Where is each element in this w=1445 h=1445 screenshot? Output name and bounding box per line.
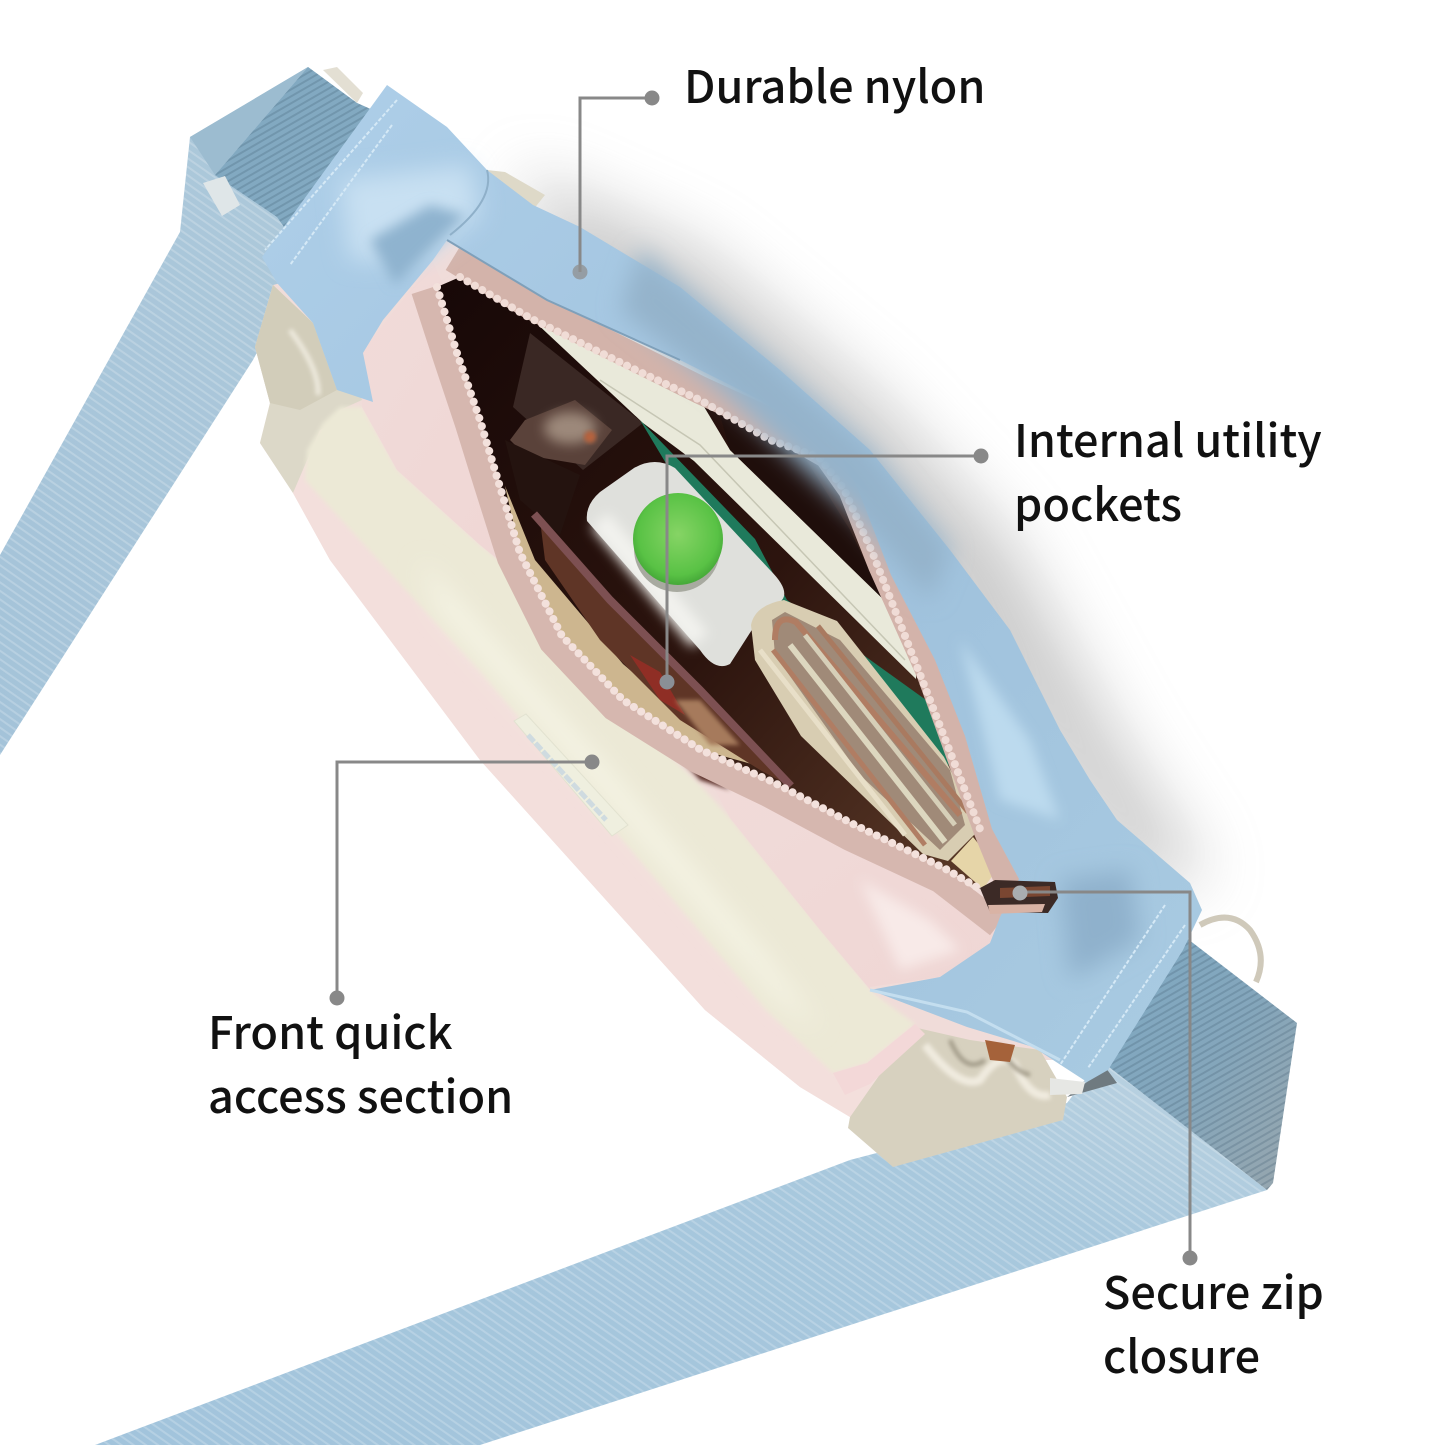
front pocket lining (505, 486, 791, 786)
callout: secure zip closure (1012, 886, 1324, 1386)
bag interior (437, 277, 998, 889)
blue nylon end cap and top panel (262, 85, 1202, 1082)
brand patch (514, 714, 628, 836)
zipper (424, 258, 1010, 925)
zipper pull (980, 880, 1058, 914)
floral inner pouch (505, 333, 643, 535)
bag back beige panels (255, 170, 1085, 1167)
wallet (751, 600, 980, 861)
callout: internal utility pockets: pockets (1014, 469, 1182, 534)
bag pink base (293, 407, 913, 1117)
callout: durable nylon (572, 51, 985, 280)
strap: lower section (95, 925, 1297, 1445)
callout: front quick access section: access section (208, 1061, 513, 1126)
callout: secure zip closure: closure (1103, 1321, 1260, 1386)
callout: durable nylon: Durable nylon (684, 51, 985, 116)
strap ring (1200, 918, 1261, 982)
front cream panel (305, 407, 925, 1095)
soft drop shadow behind bag (520, 170, 1210, 880)
bag body silhouette (255, 240, 1100, 1117)
book (533, 320, 950, 790)
green cap (633, 493, 723, 585)
lining corner (951, 837, 998, 889)
callout: front quick access section (208, 754, 600, 1126)
bottle (587, 462, 784, 666)
callout: secure zip closure: Secure zip (1103, 1257, 1324, 1322)
callout: internal utility pockets (660, 405, 1322, 690)
pink fabric near zipper (362, 262, 1000, 993)
callout: front quick access section: Front quick (208, 997, 453, 1062)
callout: internal utility pockets: Internal utility (1014, 405, 1322, 470)
strap: upper left section (0, 67, 395, 755)
